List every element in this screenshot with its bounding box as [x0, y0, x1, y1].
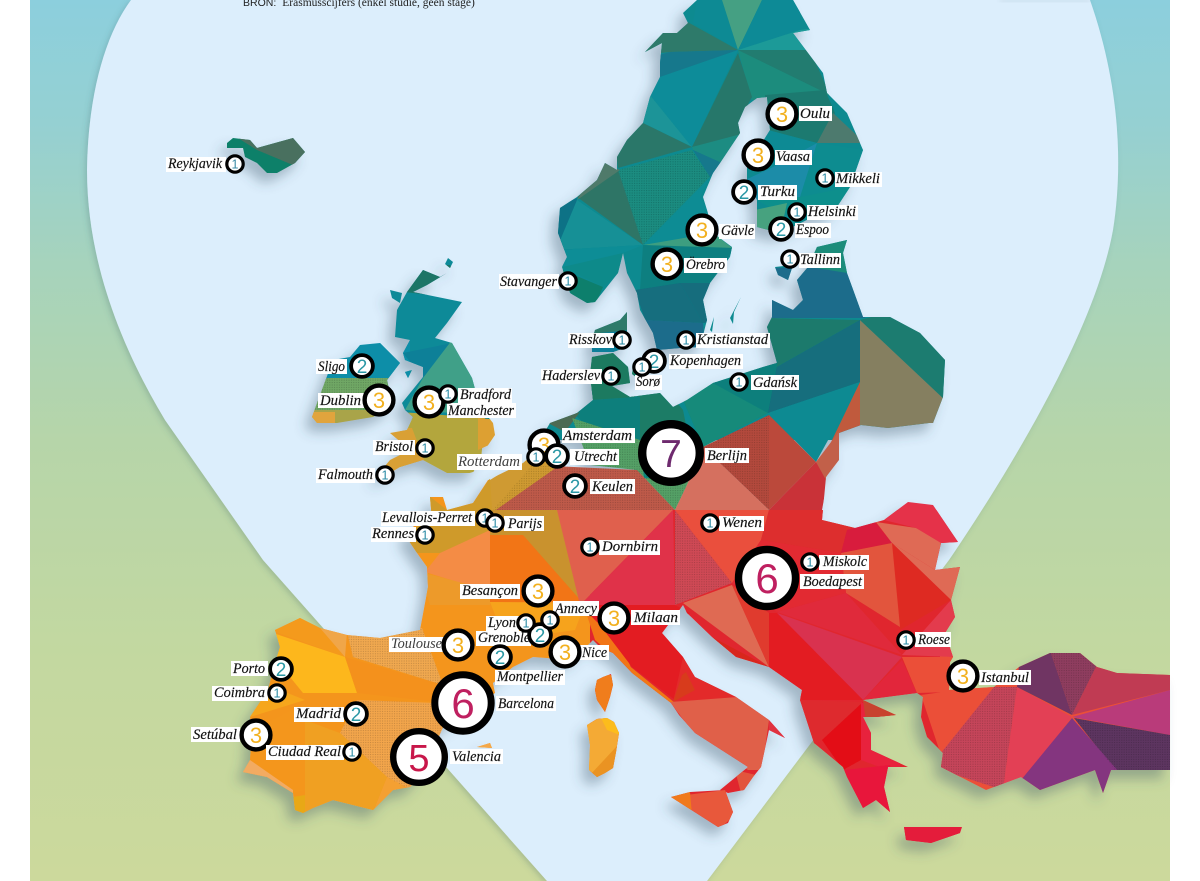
marker: Keulen: 2: [570, 477, 580, 498]
marker: Porto: 2: [276, 660, 286, 681]
marker: Annecy: Annecy: [554, 601, 598, 617]
marker: Reykjavik: Reykjavik: [167, 156, 223, 172]
marker: Madrid: Madrid: [295, 706, 342, 722]
marker: Barcelona: [435, 675, 556, 731]
marker: Roese: Roese: [917, 632, 951, 648]
marker: Kopenhagen: Kopenhagen: [669, 353, 741, 369]
marker: Kopenhagen: 2: [649, 352, 659, 373]
marker: Porto: [231, 658, 292, 681]
marker: Istanbul: [949, 662, 1031, 690]
marker: Mikkeli: [817, 170, 882, 187]
marker: Falmouth: 1: [382, 468, 389, 482]
marker: Haderslev: Haderslev: [541, 368, 601, 384]
marker: Toulouse: [389, 631, 472, 659]
marker: Coimbra: 1: [274, 686, 281, 700]
marker: Örebro: 3: [661, 252, 673, 277]
marker: Dornbirn: 1: [587, 540, 594, 554]
marker: Grenoble: Grenoble: [478, 630, 531, 646]
marker: Stavanger: Stavanger: [500, 274, 557, 290]
marker: Gävle: [688, 216, 755, 244]
marker: Rennes: 1: [422, 528, 429, 542]
marker: Wenen: [702, 515, 764, 531]
marker: Barcelona: 6: [451, 680, 475, 727]
marker: Milaan: [600, 604, 680, 632]
marker: Dublin: Dublin: [319, 393, 361, 409]
Scandinavia facets: [555, 0, 830, 352]
marker: Rotterdam: Rotterdam: [457, 454, 520, 470]
marker: Amsterdam: [530, 428, 635, 459]
marker: Roese: [898, 632, 951, 648]
dotted texture overlays: [310, 150, 1170, 790]
marker: Gävle: Gävle: [721, 223, 755, 239]
marker: Lyon: 1: [523, 616, 530, 630]
marker: Risskov: [568, 332, 630, 348]
marker: Boedapest: 6: [755, 555, 779, 602]
marker: Gdańsk: [731, 374, 799, 391]
marker: Besançon: [460, 577, 552, 605]
marker: Mikkeli: Mikkeli: [835, 171, 880, 187]
marker: Montpellier: 2: [495, 648, 505, 669]
Finland facets: [745, 90, 865, 235]
marker: Mikkeli: 1: [822, 172, 829, 186]
Italy facets: [580, 605, 790, 830]
marker: Espoo: 2: [776, 220, 786, 241]
marker: Sorø: [634, 359, 662, 390]
marker: Amsterdam: 3: [538, 433, 550, 458]
marker: Valencia: [393, 731, 503, 783]
marker: Oulu: 3: [776, 102, 788, 127]
Iceland facets: [238, 138, 305, 164]
marker: Coimbra: Coimbra: [214, 685, 265, 701]
marker: Helsinki: [789, 204, 858, 220]
marker: Sligo: Sligo: [318, 359, 345, 375]
marker: Vaasa: [744, 141, 812, 169]
marker: Annecy: 1: [547, 614, 554, 628]
marker: Kopenhagen: [643, 350, 743, 373]
marker: Ciudad Real: 1: [349, 746, 356, 760]
marker: Boedapest: [738, 550, 864, 606]
marker: Levallois-Perret: Levallois-Perret: [381, 510, 473, 526]
marker: Manchester: 3: [423, 390, 435, 415]
marker: Nice: [551, 638, 609, 666]
marker: Vaasa: Vaasa: [776, 149, 810, 165]
marker: Besançon: Besançon: [462, 583, 518, 599]
marker: Turku: [733, 181, 797, 204]
marker: Besançon: 3: [532, 579, 544, 604]
marker: Montpellier: [489, 646, 565, 685]
marker: Sorø: Sorø: [636, 374, 661, 390]
marker: Bradford: 1: [445, 388, 452, 402]
marker: Amsterdam: Amsterdam: [562, 428, 632, 444]
marker: Barcelona: Barcelona: [498, 696, 554, 712]
marker: Tallinn: 1: [787, 252, 794, 266]
marker: Vaasa: 3: [752, 143, 764, 168]
marker: Bristol: Bristol: [375, 439, 413, 455]
marker: Turku: Turku: [760, 184, 795, 200]
marker: Keulen: Keulen: [591, 479, 633, 495]
marker: Tallinn: Tallinn: [800, 252, 840, 268]
marker: Reykjavik: 1: [232, 158, 239, 172]
marker: Dornbirn: Dornbirn: [601, 539, 658, 555]
small islands: [475, 741, 965, 845]
low-poly map of Europe: [220, 0, 1170, 881]
city markers: [166, 100, 1031, 783]
marker: Berlijn: [642, 424, 749, 482]
marker: Lyon: [486, 615, 534, 631]
marker: Rennes: [371, 526, 433, 543]
marker: Milaan: Milaan: [633, 610, 678, 626]
marker: Madrid: [294, 703, 367, 726]
marker: Ciudad Real: Ciudad Real: [268, 744, 341, 760]
marker: Utrecht: [546, 445, 619, 468]
marker: Keulen: [564, 475, 635, 498]
marker: Utrecht: Utrecht: [574, 449, 618, 465]
marker: Falmouth: Falmouth: [317, 467, 373, 483]
marker: Berlijn: Berlijn: [707, 448, 747, 464]
marker: Wenen: 1: [707, 516, 714, 530]
British Isles and Ireland facets: [310, 265, 500, 482]
marker: Risskov: Risskov: [568, 332, 613, 348]
marker: Dornbirn: [582, 539, 660, 555]
marker: Wenen: Wenen: [722, 515, 762, 531]
marker: Miskolc: 1: [807, 556, 814, 570]
marker: Haderslev: 1: [608, 370, 615, 384]
marker: Bradford: [440, 386, 512, 403]
marker: Bristol: 1: [422, 442, 429, 456]
marker: Berlijn: 7: [660, 433, 682, 476]
marker: Helsinki: Helsinki: [807, 204, 856, 220]
marker: Sorø: 1: [639, 360, 646, 374]
marker: Toulouse: Toulouse: [391, 636, 443, 652]
marker: Oulu: [768, 100, 832, 128]
marker: Nice: Nice: [581, 645, 608, 661]
shadow of cropped element at top: [1000, 0, 1090, 2]
marker: Manchester: [415, 388, 516, 419]
marker: Rennes: Rennes: [371, 526, 414, 542]
marker: Grenoble: 2: [535, 626, 545, 647]
Baltic and eastern facets: [575, 238, 950, 475]
marker: Risskov: 1: [619, 334, 626, 348]
marker: Roese: 1: [903, 634, 910, 648]
marker: Parijs: 1: [492, 516, 499, 530]
marker: Miskolc: [802, 554, 869, 570]
marker: Boedapest: Boedapest: [803, 574, 863, 590]
marker: Dublin: [318, 386, 393, 414]
marker: Madrid: 2: [351, 705, 361, 726]
marker: Setúbal: Setúbal: [193, 727, 237, 743]
marker: Dublin: 3: [373, 388, 385, 413]
marker: Örebro: [653, 250, 727, 278]
marker: Levallois-Perret: 1: [482, 512, 489, 526]
northern base colours: [220, 0, 1170, 881]
marker: Sligo: [316, 355, 373, 378]
marker: Gdańsk: Gdańsk: [753, 375, 798, 391]
marker: Grenoble: [476, 624, 551, 647]
marker: Milaan: 3: [608, 606, 620, 631]
marker: Setúbal: 3: [250, 723, 262, 748]
marker: Helsinki: 1: [794, 206, 801, 220]
Turkey facets: [921, 650, 1170, 800]
marker: Utrecht: 2: [552, 447, 562, 468]
marker: Gdańsk: 1: [736, 376, 743, 390]
Balkan and Greece facets: [798, 700, 900, 815]
marker: Setúbal: [191, 721, 270, 749]
marker: Bristol: [373, 439, 433, 456]
marker: Örebro: Örebro: [686, 256, 725, 273]
Germany and Benelux facets: [488, 412, 845, 512]
marker: Istanbul: Istanbul: [980, 670, 1029, 686]
marker: Espoo: Espoo: [795, 222, 829, 238]
marker: Rotterdam: 1: [533, 450, 540, 464]
marker: Parijs: [487, 515, 544, 532]
marker: Lyon: Lyon: [487, 615, 516, 631]
marker: Sligo: 2: [357, 357, 367, 378]
marker: Montpellier: Montpellier: [496, 669, 563, 685]
marker: Nice: 3: [559, 640, 571, 665]
marker: Kristianstad: Kristianstad: [696, 332, 769, 348]
marker: Oulu: Oulu: [800, 106, 830, 122]
marker: Porto: Porto: [232, 661, 265, 677]
marker: Istanbul: 3: [957, 664, 969, 689]
marker: Stavanger: 1: [565, 274, 572, 288]
marker: Parijs: Parijs: [507, 516, 542, 532]
marker: Valencia: Valencia: [452, 749, 501, 765]
marker: Toulouse: 3: [452, 633, 464, 658]
marker: Coimbra: [212, 685, 285, 701]
marker: Rotterdam: [457, 449, 544, 470]
marker: Miskolc: Miskolc: [822, 554, 868, 570]
marker: Espoo: [770, 218, 831, 241]
marker: Tallinn: [782, 251, 841, 268]
marker: Valencia: 5: [408, 738, 430, 780]
marker: Manchester: Manchester: [447, 403, 514, 419]
marker: Turku: 2: [739, 183, 749, 204]
Iberia facets: [240, 615, 445, 815]
marker: Bradford: Bradford: [460, 387, 512, 403]
marker: Gävle: 3: [696, 218, 708, 243]
marker: Kristianstad: 1: [683, 334, 690, 348]
Central Europe facets: [580, 498, 965, 700]
marker: Annecy: [542, 601, 599, 628]
France facets: [402, 478, 673, 670]
